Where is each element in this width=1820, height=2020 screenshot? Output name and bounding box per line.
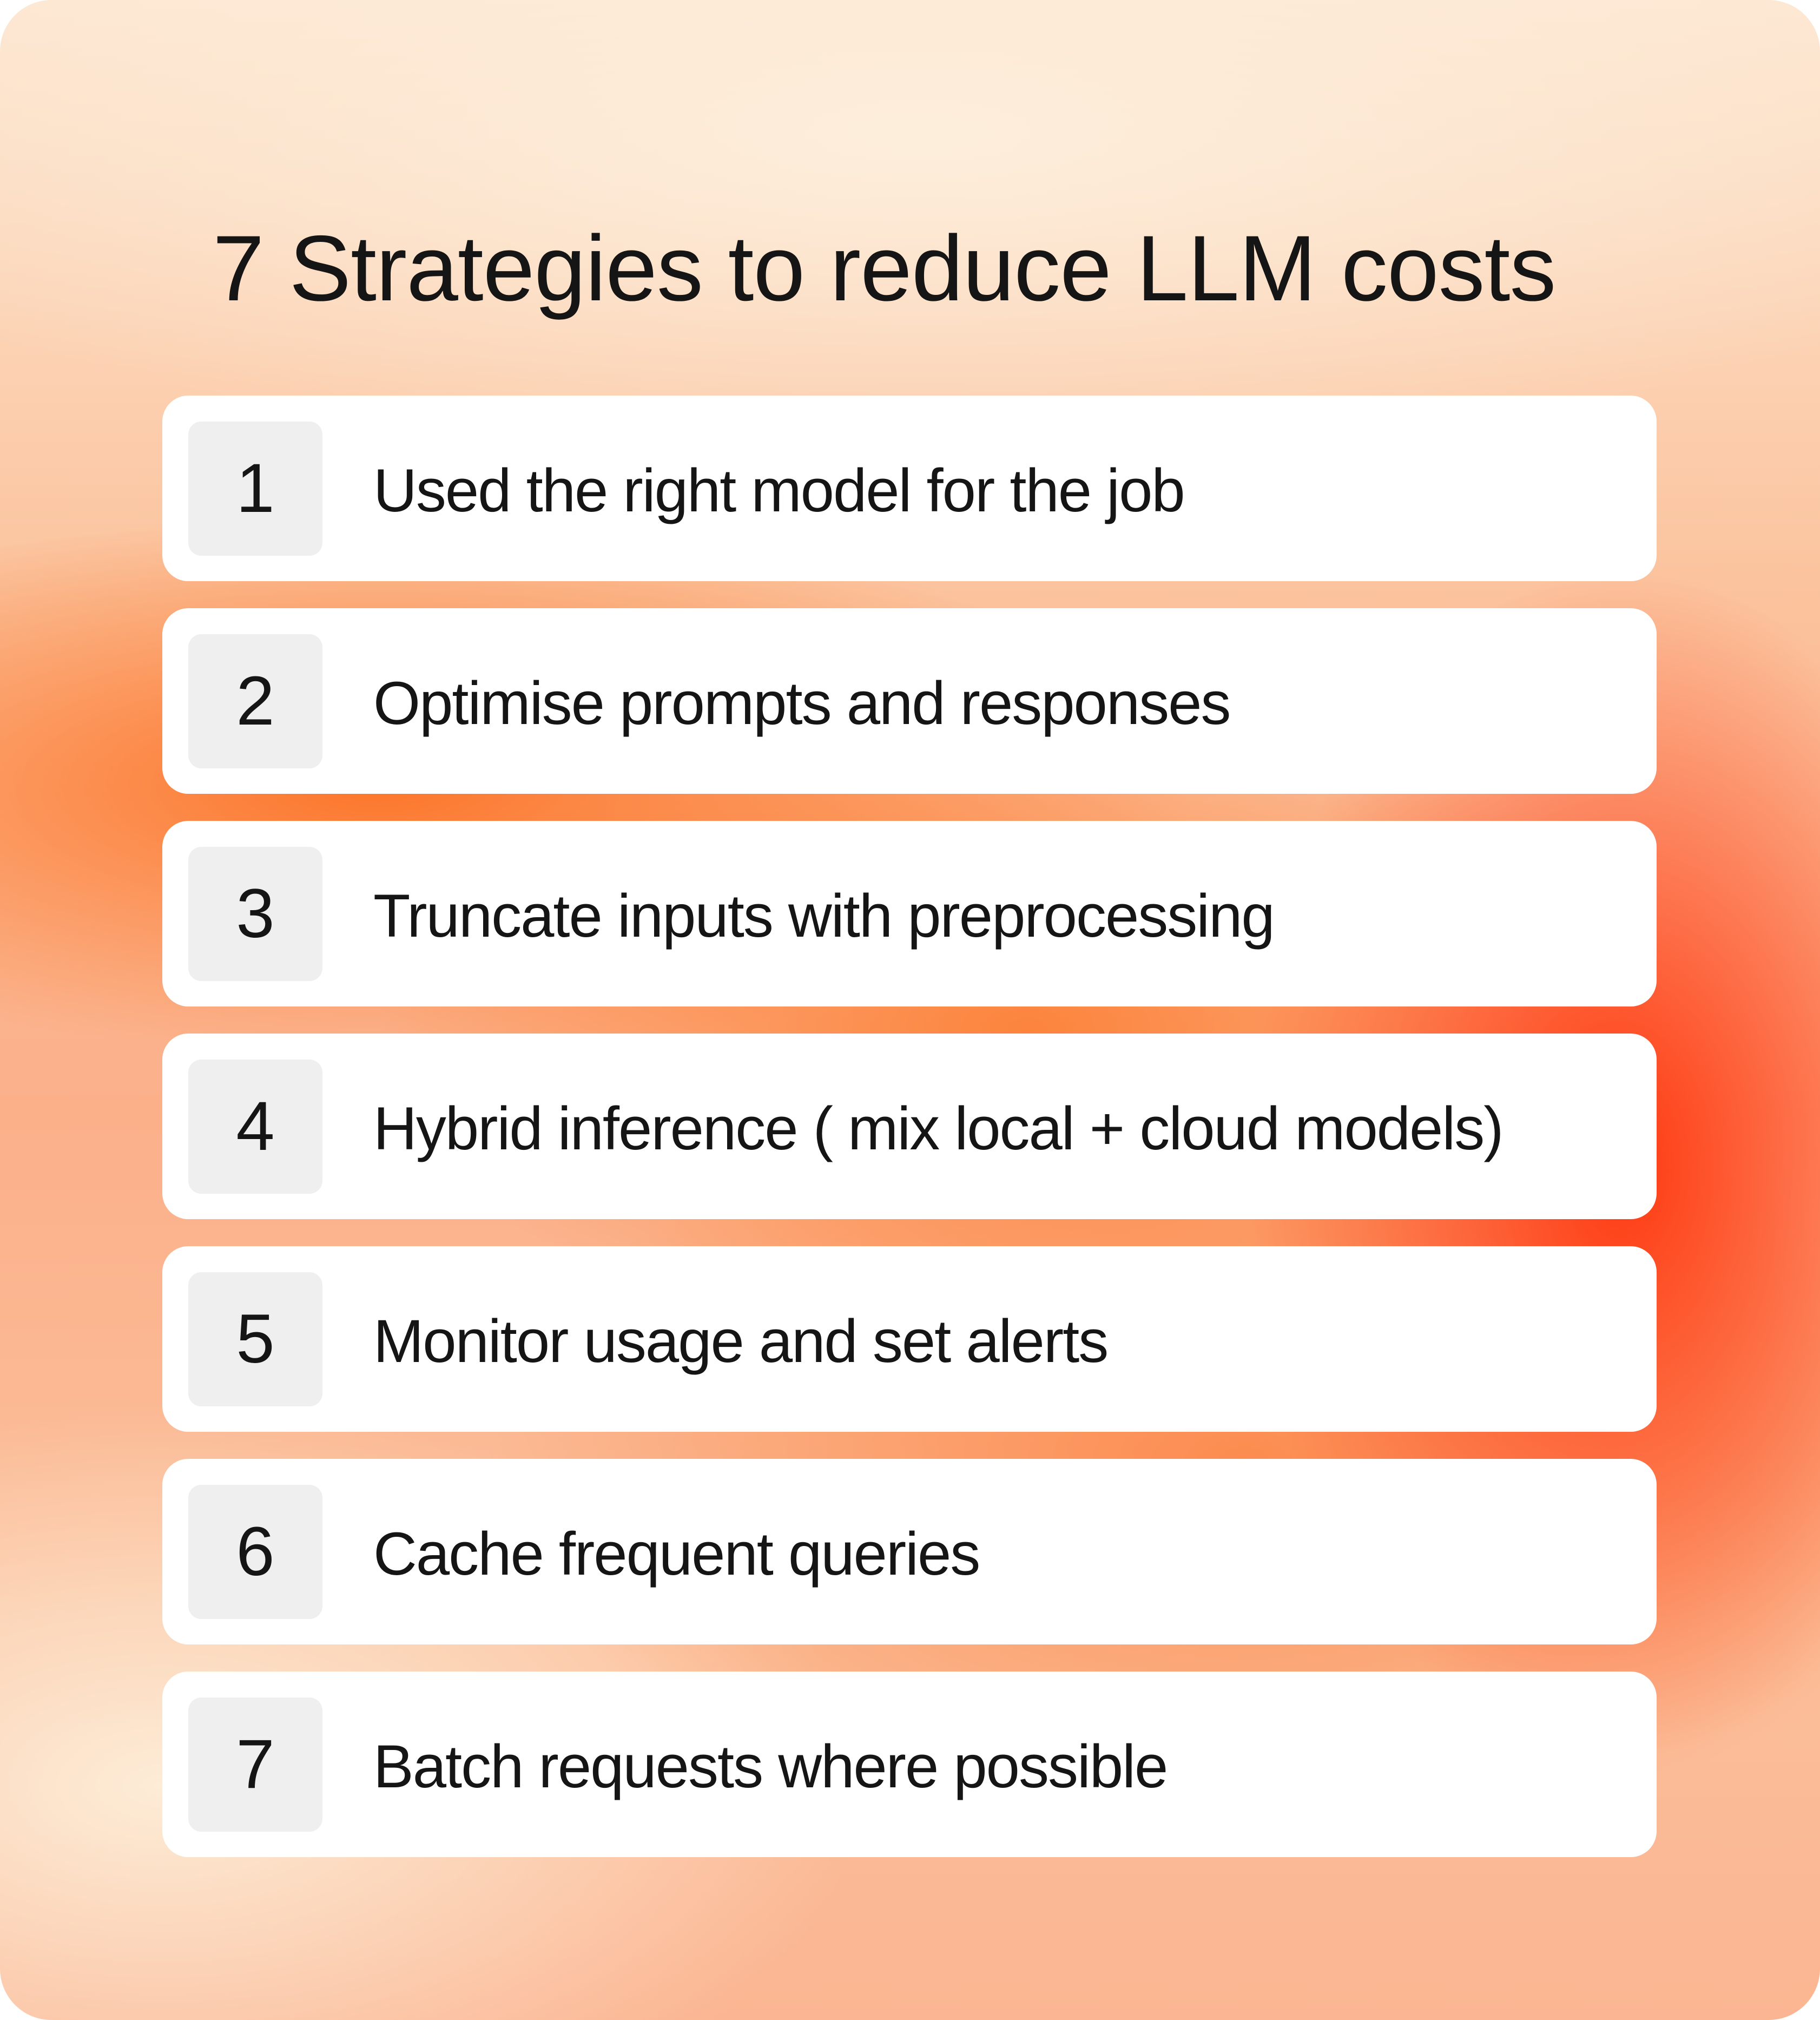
number 1 xyxy=(188,422,322,556)
text 1: Used the right model for the job xyxy=(373,457,1184,524)
text 7: Batch requests where possible xyxy=(373,1733,1167,1800)
card 1 xyxy=(162,396,1657,581)
number 3: 3 xyxy=(236,875,275,952)
title: 7 Strategies to reduce LLM costs xyxy=(213,216,1555,320)
text 6: Cache frequent queries xyxy=(373,1520,979,1588)
number 7 xyxy=(188,1697,322,1832)
number 6 xyxy=(188,1485,322,1619)
card 5 xyxy=(162,1246,1657,1432)
text 3: Truncate inputs with preprocessing xyxy=(373,882,1274,950)
number 2 xyxy=(188,634,322,768)
number 6: 6 xyxy=(236,1513,275,1590)
number 5: 5 xyxy=(236,1300,275,1378)
number 2: 2 xyxy=(236,662,275,740)
card 7 xyxy=(162,1672,1657,1857)
number 1: 1 xyxy=(236,450,275,527)
number 4 xyxy=(188,1060,322,1194)
card 3 xyxy=(162,821,1657,1006)
number 7: 7 xyxy=(236,1726,275,1803)
text 2: Optimise prompts and responses xyxy=(373,669,1230,737)
number 3 xyxy=(188,847,322,981)
card 6 xyxy=(162,1459,1657,1644)
number 4: 4 xyxy=(236,1088,275,1165)
text 4: Hybrid inference ( mix local + cloud models) xyxy=(373,1095,1503,1162)
card 2 xyxy=(162,608,1657,794)
card 4 xyxy=(162,1034,1657,1219)
number 5 xyxy=(188,1272,322,1406)
text 5: Monitor usage and set alerts xyxy=(373,1307,1107,1375)
